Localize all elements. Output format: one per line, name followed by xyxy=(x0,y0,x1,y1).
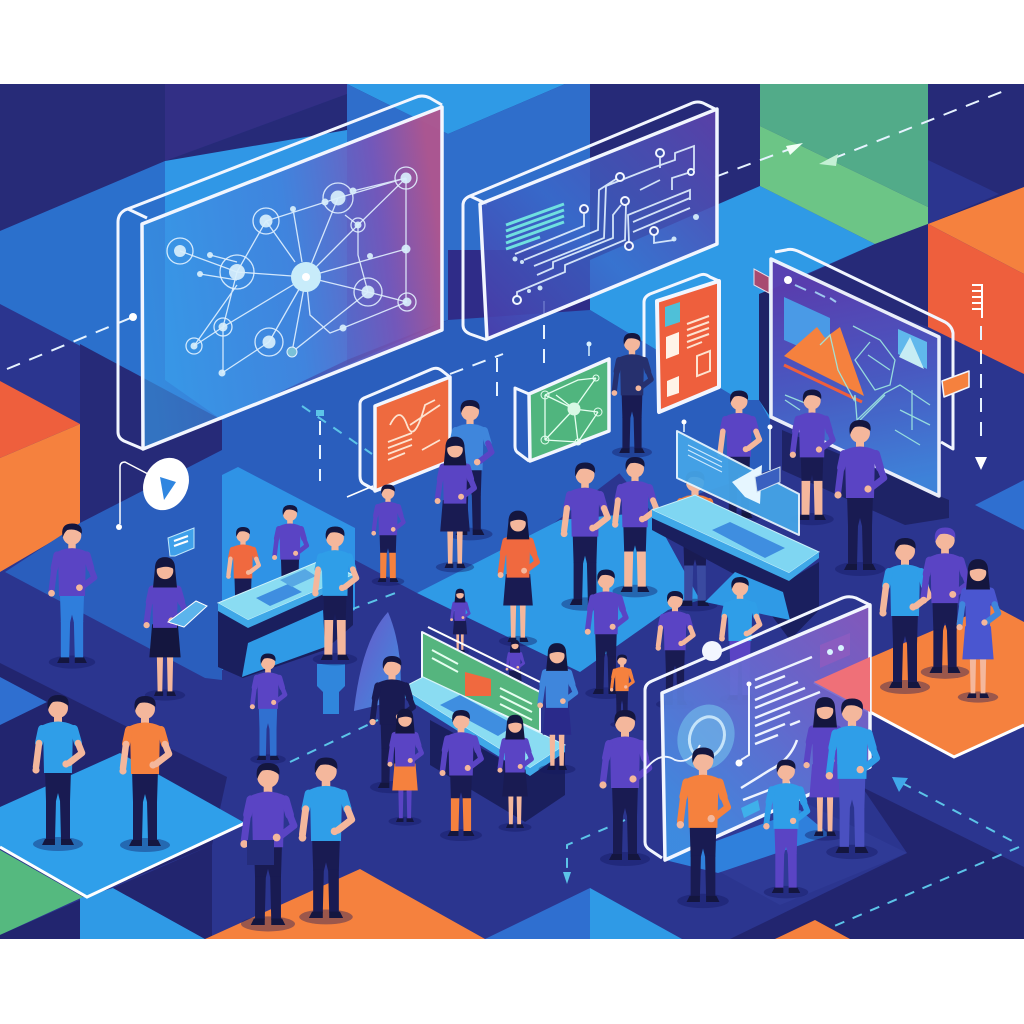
data bars xyxy=(506,204,564,249)
person xyxy=(450,589,469,654)
icon: chat bubble xyxy=(168,528,194,556)
person xyxy=(498,511,537,646)
folder xyxy=(247,840,274,865)
panel: network graph xyxy=(118,96,442,449)
person: seated xyxy=(250,654,286,764)
person xyxy=(32,695,83,851)
person xyxy=(299,758,353,924)
network diagram xyxy=(167,167,417,376)
person xyxy=(240,763,295,931)
table: center xyxy=(652,495,819,640)
person xyxy=(272,505,308,614)
pink reflection xyxy=(814,657,870,712)
person xyxy=(143,557,185,701)
person xyxy=(610,654,634,728)
table: left xyxy=(218,560,353,678)
crystal sculpture xyxy=(354,612,401,711)
person xyxy=(612,457,658,597)
icon: play button xyxy=(116,450,197,530)
person xyxy=(599,710,650,866)
floor platforms xyxy=(0,512,1024,905)
person xyxy=(497,715,532,832)
chart tiles and mountains xyxy=(784,276,930,445)
held card xyxy=(741,800,760,818)
person xyxy=(717,390,760,523)
arrows xyxy=(129,143,987,884)
person xyxy=(834,420,885,576)
person xyxy=(537,643,575,774)
person xyxy=(803,697,845,841)
person xyxy=(387,709,422,826)
person xyxy=(672,471,718,611)
person xyxy=(656,591,694,710)
person xyxy=(585,570,627,699)
tablet held xyxy=(168,601,207,627)
screen: center table xyxy=(677,420,799,535)
person xyxy=(763,760,808,898)
person xyxy=(612,333,652,458)
person xyxy=(920,528,969,679)
tag on screen xyxy=(942,371,969,397)
person xyxy=(435,437,474,572)
person xyxy=(790,390,834,525)
circuit lines xyxy=(512,146,699,304)
panel: green network screen xyxy=(515,342,609,461)
person xyxy=(879,538,930,694)
person xyxy=(677,748,729,908)
person xyxy=(312,526,357,665)
person xyxy=(48,524,95,669)
panel: code screen xyxy=(645,597,870,860)
person xyxy=(369,656,414,793)
person xyxy=(439,710,482,841)
panel: image editor screen xyxy=(754,249,953,525)
stool xyxy=(317,664,345,714)
panel: circuit board xyxy=(463,102,717,340)
person xyxy=(561,462,609,611)
panel: orange map screen xyxy=(347,368,450,497)
person xyxy=(371,484,404,586)
person xyxy=(826,698,878,859)
person xyxy=(447,400,492,540)
panel: orange tablet xyxy=(644,274,719,412)
code lines xyxy=(645,633,850,800)
person xyxy=(719,577,760,705)
person xyxy=(119,696,170,852)
table: bottom xyxy=(402,677,565,822)
person xyxy=(506,640,524,702)
person xyxy=(226,527,260,630)
screen: bottom table xyxy=(422,627,540,732)
person xyxy=(956,559,998,703)
